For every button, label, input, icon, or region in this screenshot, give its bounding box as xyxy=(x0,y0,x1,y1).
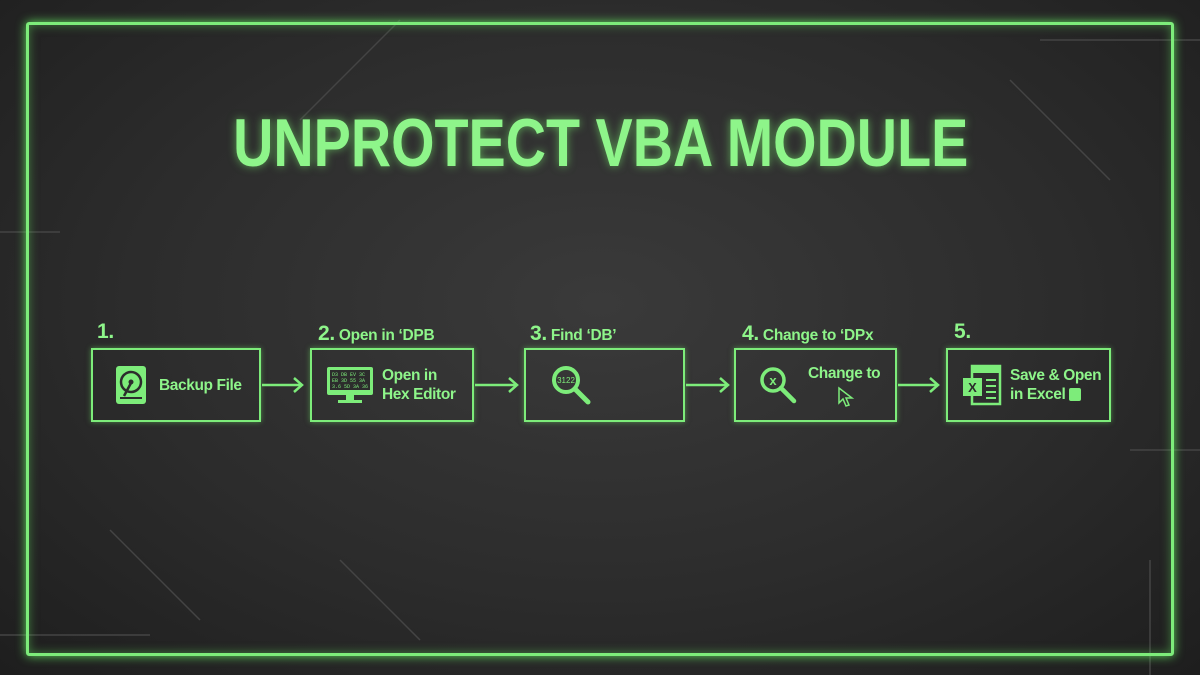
icon: monitor: 3.6 5D 3A 36 xyxy=(332,384,368,390)
text: Backup File xyxy=(159,376,242,394)
step 2 box xyxy=(310,348,474,422)
icon: magnifier x xyxy=(760,367,796,404)
arrow 1 xyxy=(262,377,304,393)
text: Open in xyxy=(382,367,437,384)
icon: magnifier: 3122 xyxy=(557,376,575,385)
text: in Excel xyxy=(1010,386,1065,403)
icon: magnifier x: x xyxy=(769,373,777,388)
title: UNPROTECT VBA MODULE xyxy=(233,105,968,181)
step 5 label: 5. xyxy=(954,320,971,343)
step 4 box xyxy=(734,348,897,422)
text xyxy=(382,367,456,403)
arrow 3 xyxy=(686,377,730,393)
step 4 label: 4. Change to ‘DPx xyxy=(742,322,873,345)
text xyxy=(1010,367,1101,403)
text + cursor: Change to xyxy=(808,365,880,382)
icon: monitor: EB 3D 55 3A xyxy=(332,378,365,384)
icon: hard drive xyxy=(116,366,146,404)
step 2 label: 2. Open in ‘DPB xyxy=(318,322,434,345)
arrow 4 xyxy=(898,377,940,393)
step 5 box xyxy=(946,348,1111,422)
step 3 box xyxy=(524,348,685,422)
icon: monitor: D3 DB EV 3C xyxy=(332,372,365,378)
step 1 box xyxy=(91,348,261,422)
icon: monitor xyxy=(327,367,373,403)
step 1 label: 1. xyxy=(97,320,114,343)
icon: excel xyxy=(963,364,1002,406)
text + cursor xyxy=(808,365,880,407)
icon: excel: X xyxy=(968,380,977,395)
text: Hex Editor xyxy=(382,386,456,403)
icon: magnifier xyxy=(552,366,590,404)
arrow 2 xyxy=(475,377,519,393)
step 3 label: 3. Find ‘DB’ xyxy=(530,322,616,345)
text: Save & Open xyxy=(1010,367,1101,384)
